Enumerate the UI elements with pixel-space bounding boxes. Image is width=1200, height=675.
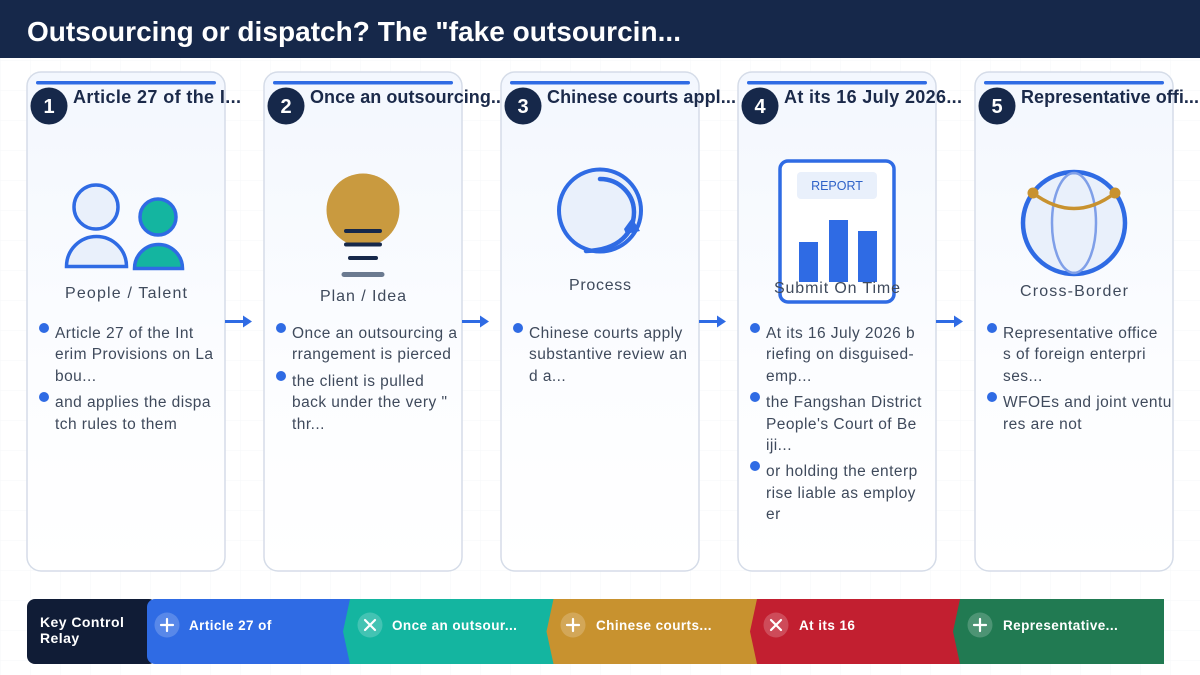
bullet list: WFOEs and joint ventu <box>1003 394 1172 411</box>
step number 5 <box>978 88 1016 124</box>
panel: step 5 <box>975 72 1199 571</box>
step 1 heading: Article 27 of the I... <box>73 87 241 107</box>
step 5 heading: Representative offi... <box>1021 87 1199 107</box>
key control relay bar <box>27 599 1164 664</box>
bullet list: the Fangshan District <box>766 394 922 411</box>
icon: process cycle <box>559 170 641 252</box>
icon: people <box>66 185 182 268</box>
bullet list: tch rules to them <box>55 416 177 433</box>
arrow 2 to 3 <box>462 316 489 328</box>
bullet list: ses... <box>1003 368 1043 385</box>
bullet list: and applies the dispa <box>55 394 211 411</box>
bullet list <box>39 323 214 433</box>
bullet list: substantive review an <box>529 346 688 363</box>
relay segment: Once an outsourcing <box>343 599 554 664</box>
panel: step 3 <box>501 72 736 571</box>
relay segment: Once an outsourcing: Once an outsour... <box>392 618 517 633</box>
bullet list: Chinese courts apply <box>529 325 683 342</box>
step number 4: 4 <box>754 96 766 118</box>
relay segment: Article 27: Article 27 of <box>189 618 272 633</box>
step 4 heading: At its 16 July 2026... <box>784 87 962 107</box>
bullet list: bou... <box>55 368 96 385</box>
relay segment: Representative <box>953 599 1164 664</box>
icon label: Process <box>569 277 631 294</box>
relay label <box>27 599 157 664</box>
bullet list: d a... <box>529 368 566 385</box>
bullet list: At its 16 July 2026 b <box>766 325 915 342</box>
step number 2 <box>268 88 304 124</box>
relay segment: Article 27 <box>147 599 351 664</box>
step number 1 <box>30 88 68 124</box>
bullet list: riefing on disguised- <box>766 346 914 363</box>
relay segment: Chinese courts: Chinese courts... <box>596 618 712 633</box>
step number 4 <box>742 88 778 124</box>
bullet list: erim Provisions on La <box>55 346 214 363</box>
relay segment: At its 16: At its 16 <box>799 618 855 633</box>
icon label: Plan / Idea <box>320 288 406 305</box>
relay label: Relay <box>40 630 80 646</box>
bullet list <box>513 323 688 385</box>
bullet list: res are not <box>1003 416 1082 433</box>
bullet list <box>987 323 1172 433</box>
bullet list: Representative office <box>1003 325 1158 342</box>
panel: step 2 <box>264 72 506 571</box>
relay label: Key Control <box>40 614 124 630</box>
icon: report: REPORT <box>811 179 863 193</box>
arrow 4 to 5 <box>936 316 963 328</box>
bullet list: s of foreign enterpri <box>1003 346 1146 363</box>
bullet list: or holding the enterp <box>766 463 918 480</box>
header banner <box>0 0 1200 58</box>
bullet list: rrangement is pierced <box>292 346 451 363</box>
bullet list: er <box>766 506 781 523</box>
arrow 3 to 4 <box>699 316 726 328</box>
relay segment: Representative: Representative... <box>1003 618 1118 633</box>
step 2 heading: Once an outsourcing... <box>310 87 506 107</box>
icon: report <box>780 161 894 302</box>
step number 1: 1 <box>43 96 55 118</box>
bullet list: rise liable as employ <box>766 485 916 502</box>
bullet list <box>750 323 922 523</box>
relay segment: Chinese courts <box>546 599 758 664</box>
step number 5: 5 <box>991 96 1003 118</box>
icon: light bulb <box>326 174 400 274</box>
icon label: Cross-Border <box>1020 283 1129 300</box>
bullet list: Once an outsourcing a <box>292 325 457 342</box>
panel: step 4 <box>738 72 962 571</box>
bullet list: People's Court of Be <box>766 416 917 433</box>
step number 2: 2 <box>280 96 292 118</box>
step number 3: 3 <box>517 96 529 118</box>
bullet list: back under the very " <box>292 394 447 411</box>
icon label: People / Talent <box>65 285 188 302</box>
bullet list: iji... <box>766 437 792 454</box>
panel: step 1 <box>27 72 241 571</box>
bullet list: thr... <box>292 416 325 433</box>
arrow 1 to 2 <box>225 316 252 328</box>
relay segment: At its 16 <box>750 599 961 664</box>
bullet list: emp... <box>766 368 812 385</box>
step 3 heading: Chinese courts appl... <box>547 87 736 107</box>
bullet list <box>276 323 457 433</box>
bullet list: Article 27 of the Int <box>55 325 194 342</box>
icon: globe <box>1023 172 1125 274</box>
bullet list: the client is pulled <box>292 373 424 390</box>
icon label: Submit On Time <box>774 280 900 297</box>
title: Outsourcing or dispatch? The "fake outsourcin... <box>27 16 681 47</box>
step number 3 <box>504 88 542 124</box>
